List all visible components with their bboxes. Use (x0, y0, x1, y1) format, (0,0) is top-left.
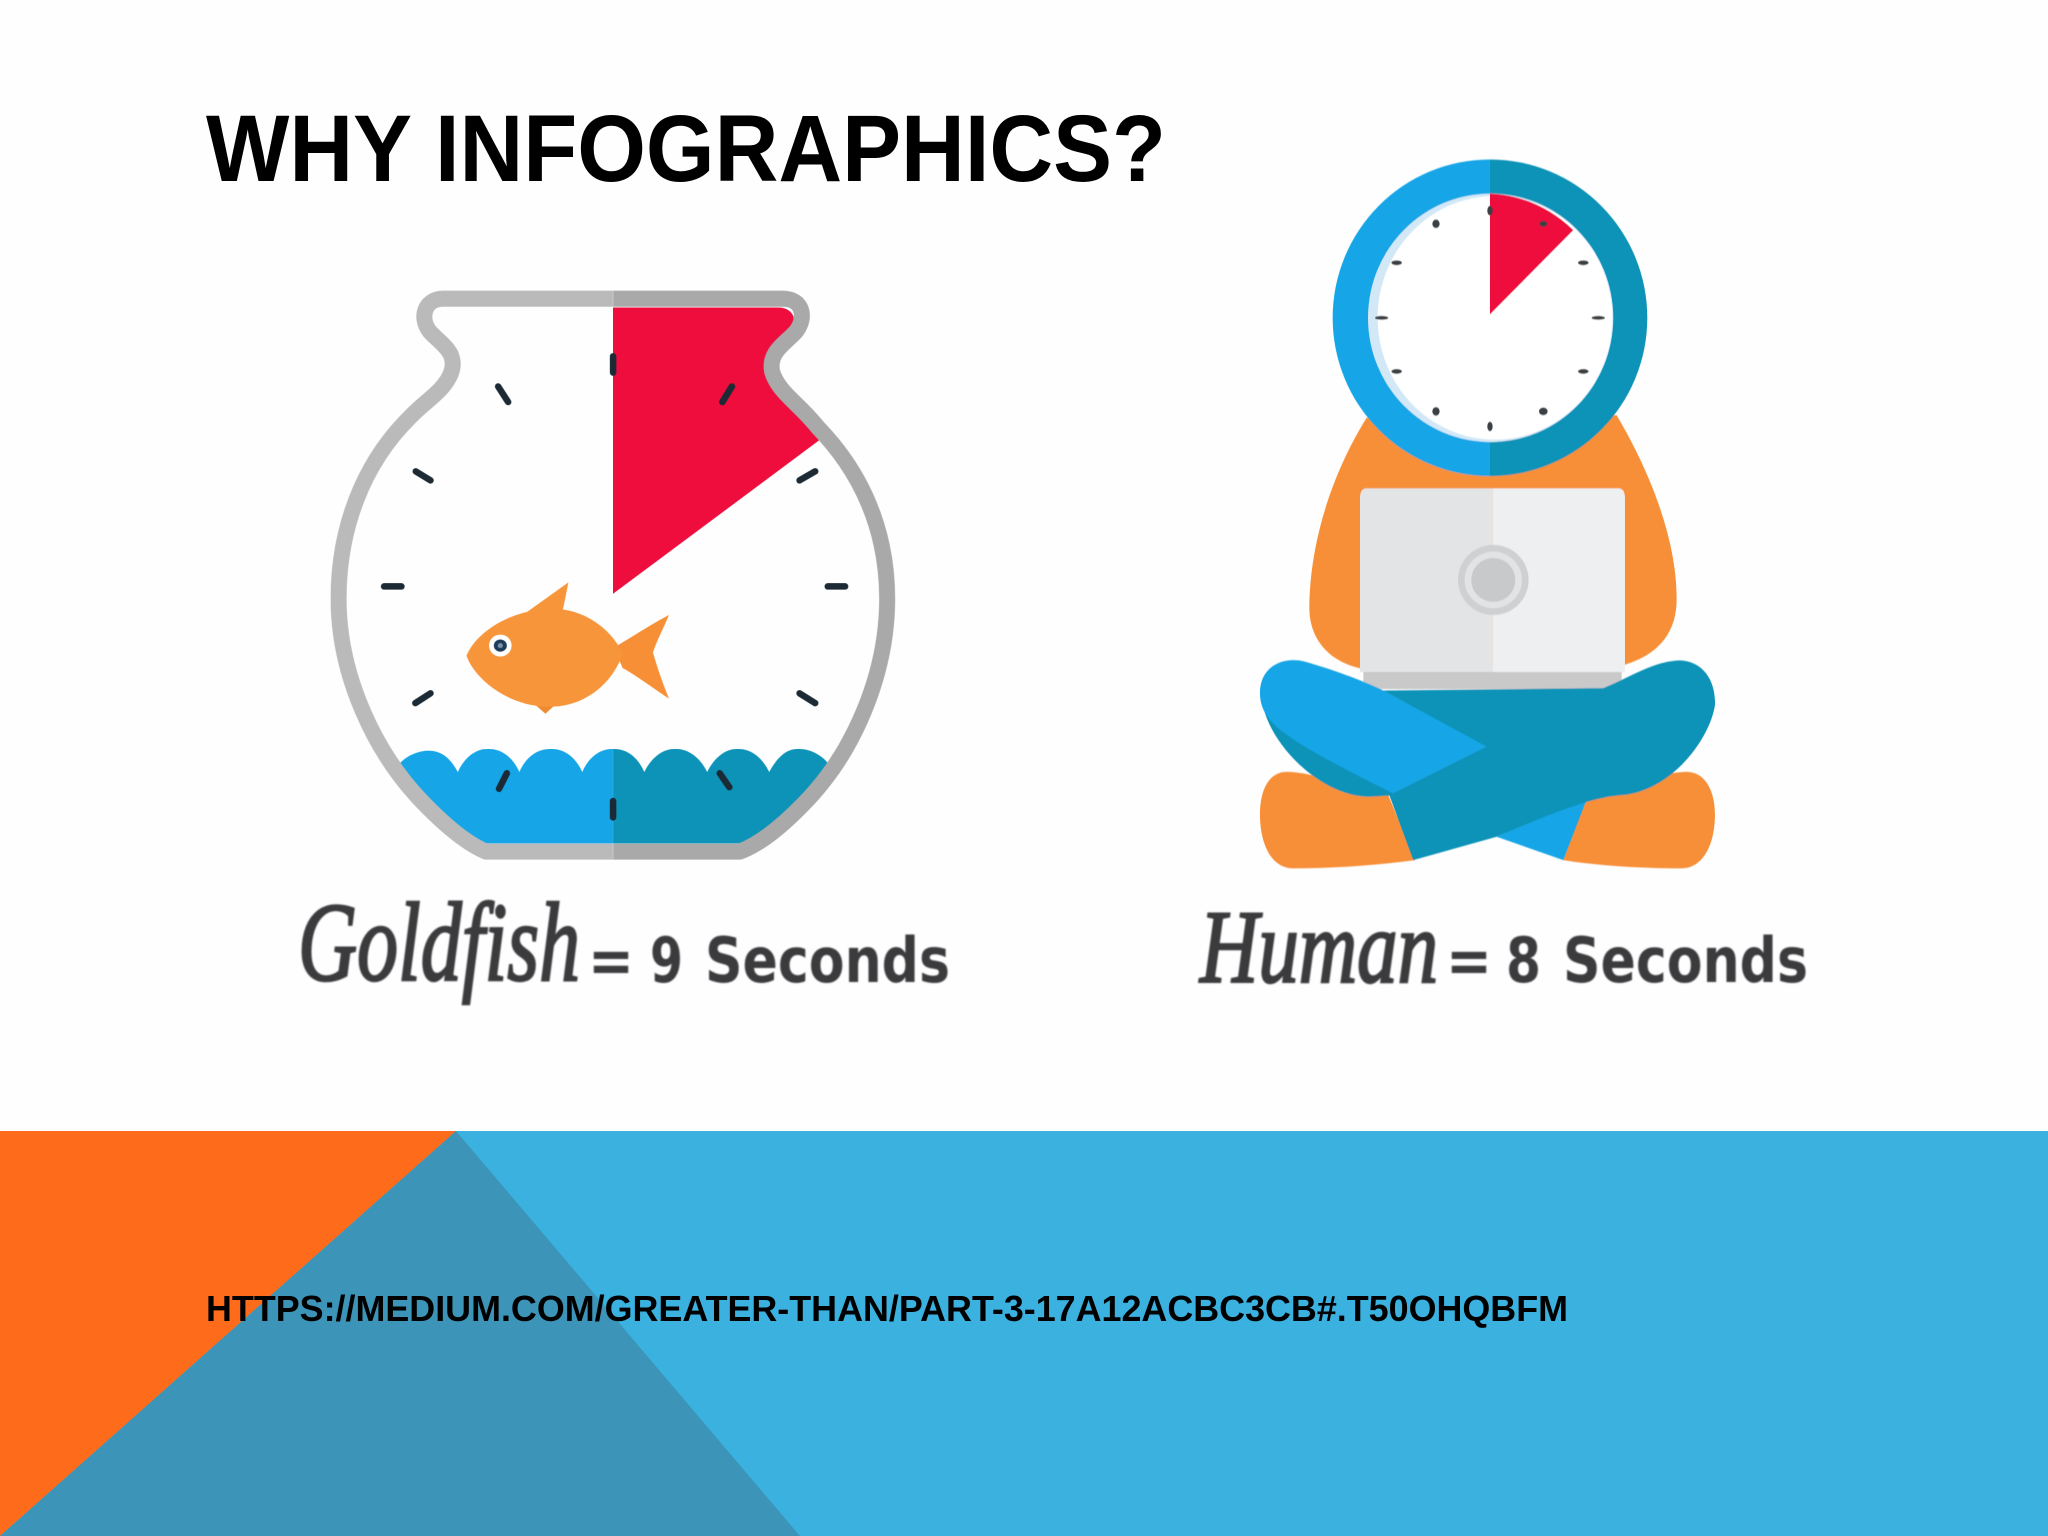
caption: human: = (1446, 924, 1492, 997)
dark blue leg (1383, 660, 1715, 860)
fish eye (489, 635, 512, 657)
laptop (1360, 488, 1625, 689)
red time wedge (613, 307, 821, 594)
source url: HTTPS://MEDIUM.COM/GREATER-THAN/PART-3-17A12ACBC3CB#.T50OHQBFM (206, 1288, 1568, 1329)
clock tick marks (384, 356, 845, 817)
caption: goldfish (298, 881, 950, 1005)
caption: human: Seconds (1563, 924, 1808, 997)
water (399, 749, 829, 843)
caption: goldfish: 9 (650, 924, 683, 997)
caption: goldfish: Goldfish (298, 881, 580, 1005)
red clock wedge (1490, 194, 1573, 314)
caption: human: 8 (1506, 924, 1541, 997)
title: WHY INFOGRAPHICS? (206, 96, 1166, 202)
caption: goldfish: = (588, 924, 634, 997)
human with clock head illustration (1260, 159, 1715, 868)
orange left foot (1260, 772, 1415, 868)
orange corner triangle (0, 1131, 456, 1536)
orange body (1309, 415, 1677, 669)
caption: goldfish: Seconds (705, 924, 950, 997)
goldfish bowl illustration (339, 299, 887, 852)
footer band (0, 1131, 2048, 1536)
caption: human: Human (1198, 890, 1438, 1005)
laptop logo (1458, 545, 1529, 615)
caption: human (1198, 890, 1808, 1005)
goldfish (466, 582, 669, 714)
clock head (1333, 159, 1647, 476)
orange right foot (1563, 772, 1715, 868)
bowl outline (339, 299, 887, 852)
clock ticks (1375, 206, 1605, 431)
light blue leg (1260, 660, 1588, 860)
overlap triangle (0, 1131, 800, 1536)
